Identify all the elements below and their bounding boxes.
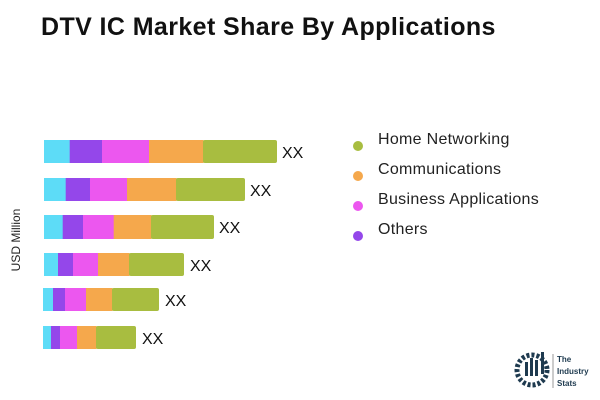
bar 4 (44, 253, 212, 276)
bar 3: XX (219, 220, 241, 237)
bar 5 (43, 288, 187, 311)
legend: Communications (378, 161, 501, 178)
title: DTV IC Market Share By Applications (41, 13, 496, 41)
legend (353, 131, 539, 241)
legend: Others (378, 221, 428, 238)
legend: Home Networking (378, 131, 510, 148)
bar 1 (44, 140, 304, 163)
bar 5: XX (165, 293, 187, 310)
bar 6 (43, 326, 164, 349)
bar 1: XX (282, 145, 304, 162)
bar 2 (44, 178, 272, 201)
logo (517, 352, 589, 388)
bar 2: XX (250, 183, 272, 200)
legend: Business Applications (378, 191, 539, 208)
logo: Industry (557, 367, 589, 376)
logo: Stats (557, 379, 577, 388)
logo: The (557, 355, 572, 364)
bar 4: XX (190, 258, 212, 275)
y axis label: USD Million (9, 209, 23, 271)
bar 3 (44, 215, 241, 239)
bar 6: XX (142, 331, 164, 348)
